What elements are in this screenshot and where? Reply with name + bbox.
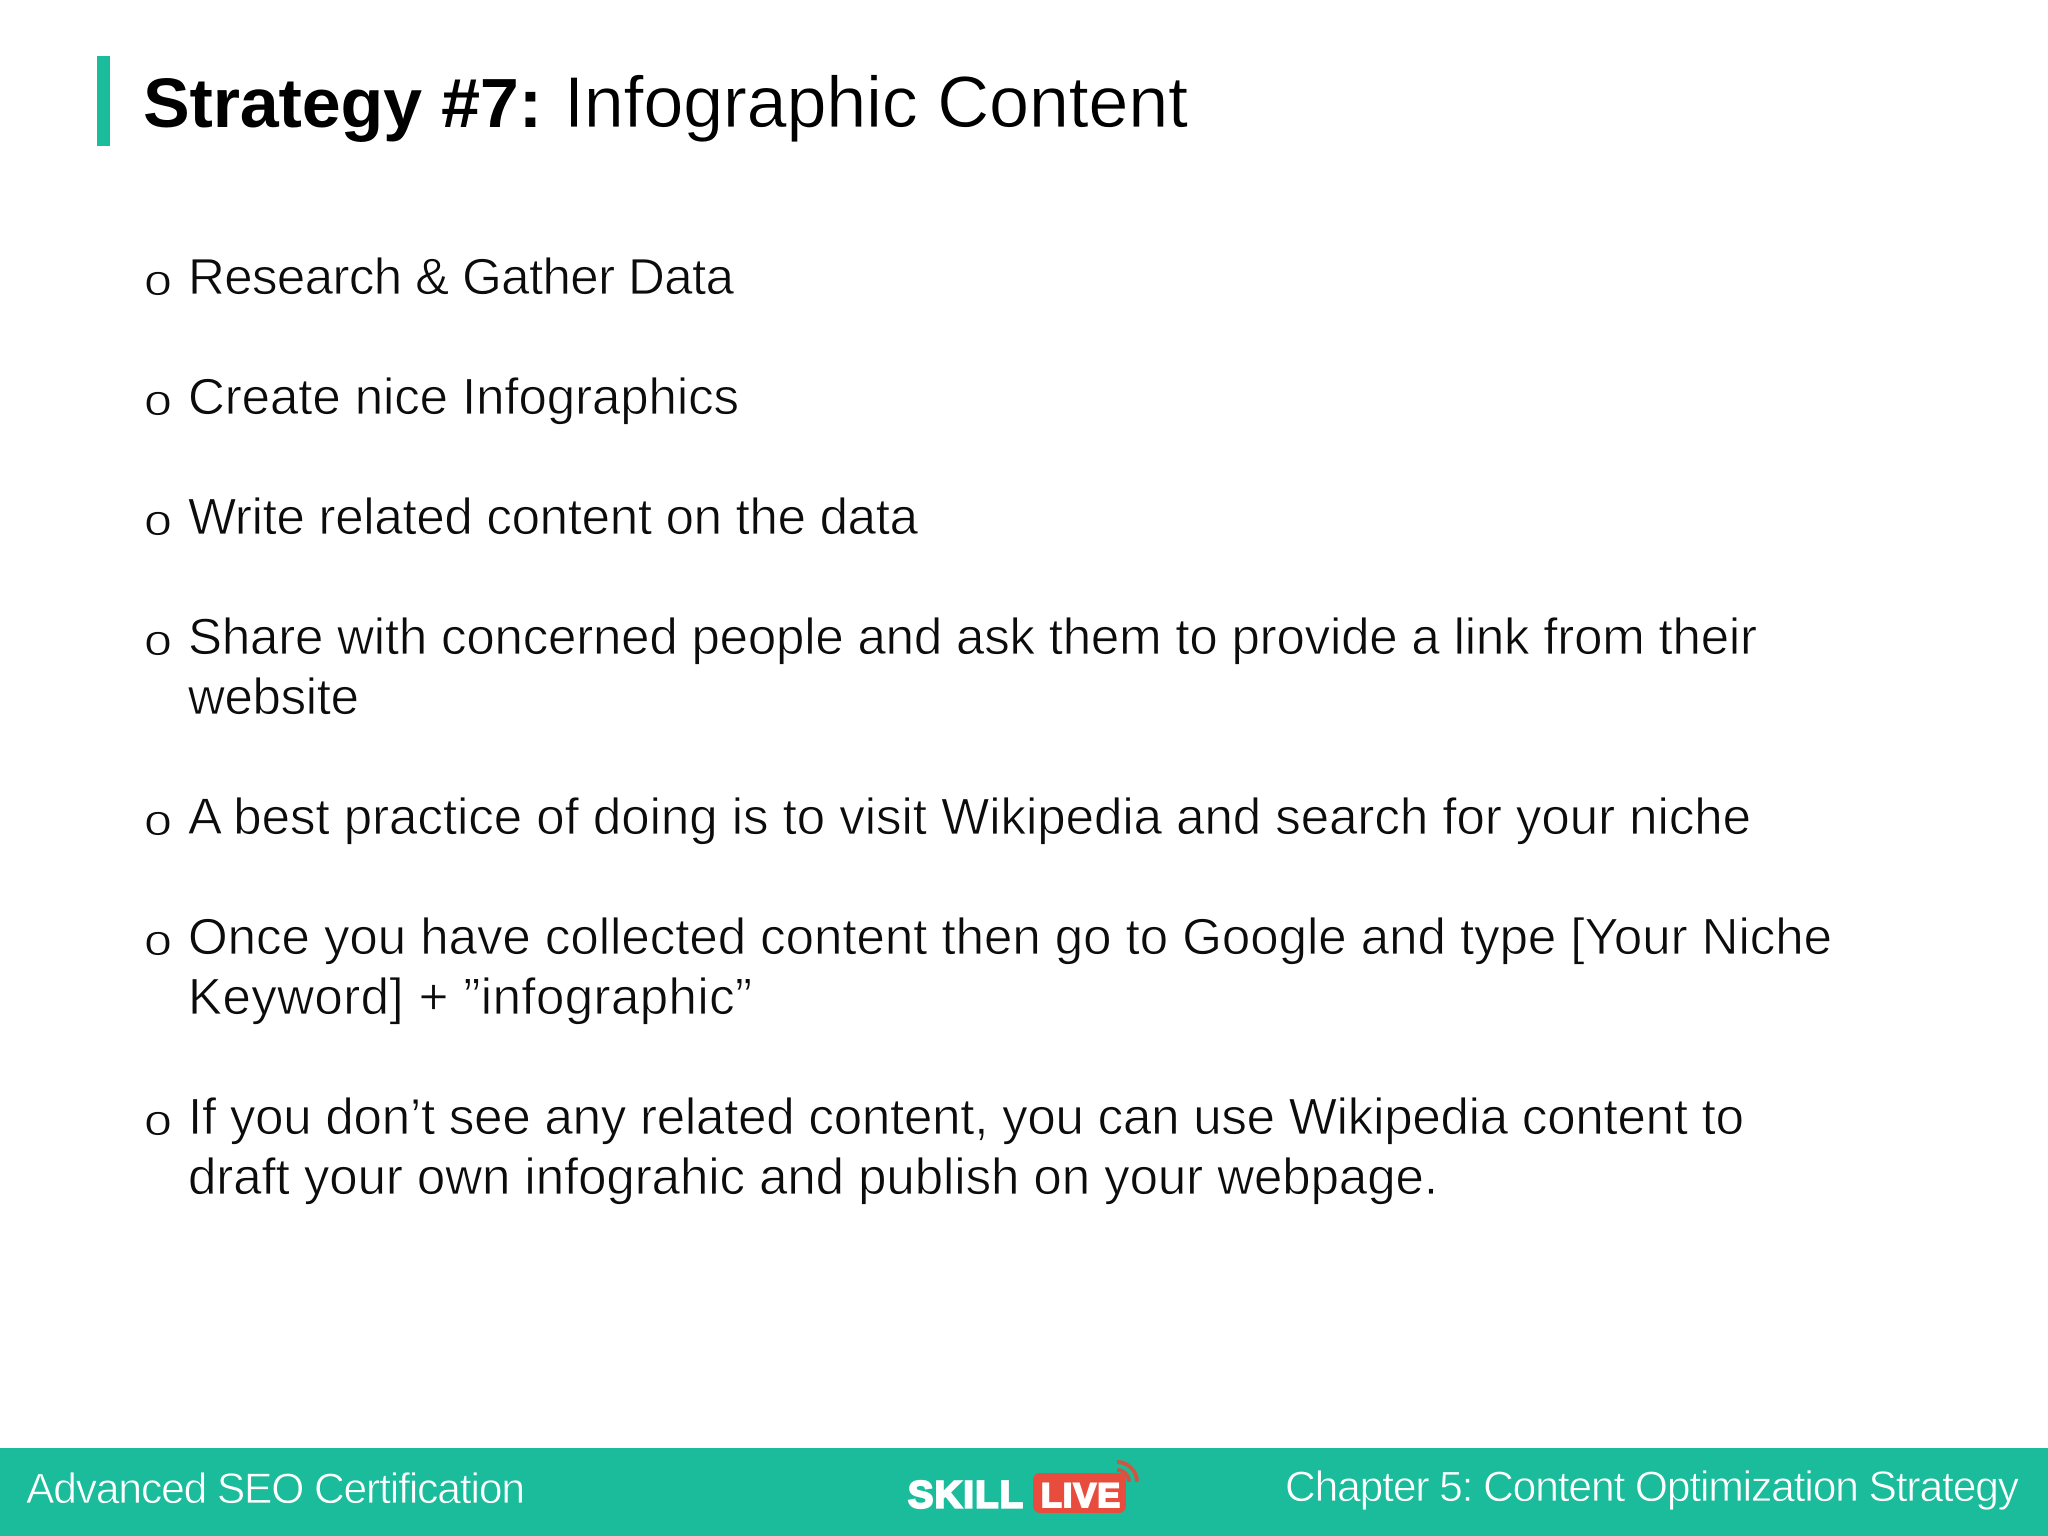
bullet: no related content bbox=[144, 1088, 1744, 1205]
bullet: share: Share with concerned people and ask them to provide a link from their bbox=[188, 608, 1757, 665]
title: Strategy #7: bbox=[143, 64, 542, 142]
logo: Skill Live: LIVE bbox=[1041, 1477, 1120, 1515]
bullet: research: Research & Gather Data bbox=[188, 248, 735, 305]
accent bar bbox=[97, 56, 110, 146]
bullet: once collected: o bbox=[144, 916, 172, 965]
bullet: no related content: If you don’t see any related content, you can use Wikipedia content to bbox=[188, 1088, 1744, 1145]
footer right text: Chapter 5: Content Optimization Strategy bbox=[1285, 1464, 2020, 1511]
footer band bbox=[0, 1448, 2048, 1536]
logo: Skill Live bbox=[908, 1462, 1137, 1516]
title bbox=[143, 63, 1188, 143]
bullet: research: o bbox=[144, 256, 172, 305]
footer left text: Advanced SEO Certification bbox=[26, 1466, 525, 1513]
bullet: no related content: o bbox=[144, 1096, 172, 1145]
icon: signal arcs bbox=[1117, 1462, 1137, 1482]
bullet: share: website bbox=[187, 668, 359, 725]
bullet: create: o bbox=[144, 376, 172, 425]
bullet: best practice: o bbox=[144, 796, 172, 845]
bullet: once collected: Once you have collected content then go to Google and type [Your Niche bbox=[188, 908, 1832, 965]
bullet: share: o bbox=[144, 616, 172, 665]
logo: Skill Live: SKILL bbox=[908, 1474, 1023, 1516]
bullet list bbox=[144, 248, 1832, 1205]
bullet: once collected bbox=[144, 908, 1832, 1025]
bullet: create: Create nice Infographics bbox=[188, 368, 739, 425]
bullet: no related content: draft your own infograhic and publish on your webpage. bbox=[188, 1148, 1438, 1205]
bullet: best practice: A best practice of doing is to visit Wikipedia and search for your niche bbox=[188, 788, 1751, 845]
bullet: write: o bbox=[144, 496, 172, 545]
title: Infographic Content bbox=[564, 63, 1188, 143]
bullet: write: Write related content on the data bbox=[188, 488, 919, 545]
bullet: once collected: Keyword] + ”infographic” bbox=[188, 968, 752, 1025]
bullet: share bbox=[144, 608, 1757, 725]
